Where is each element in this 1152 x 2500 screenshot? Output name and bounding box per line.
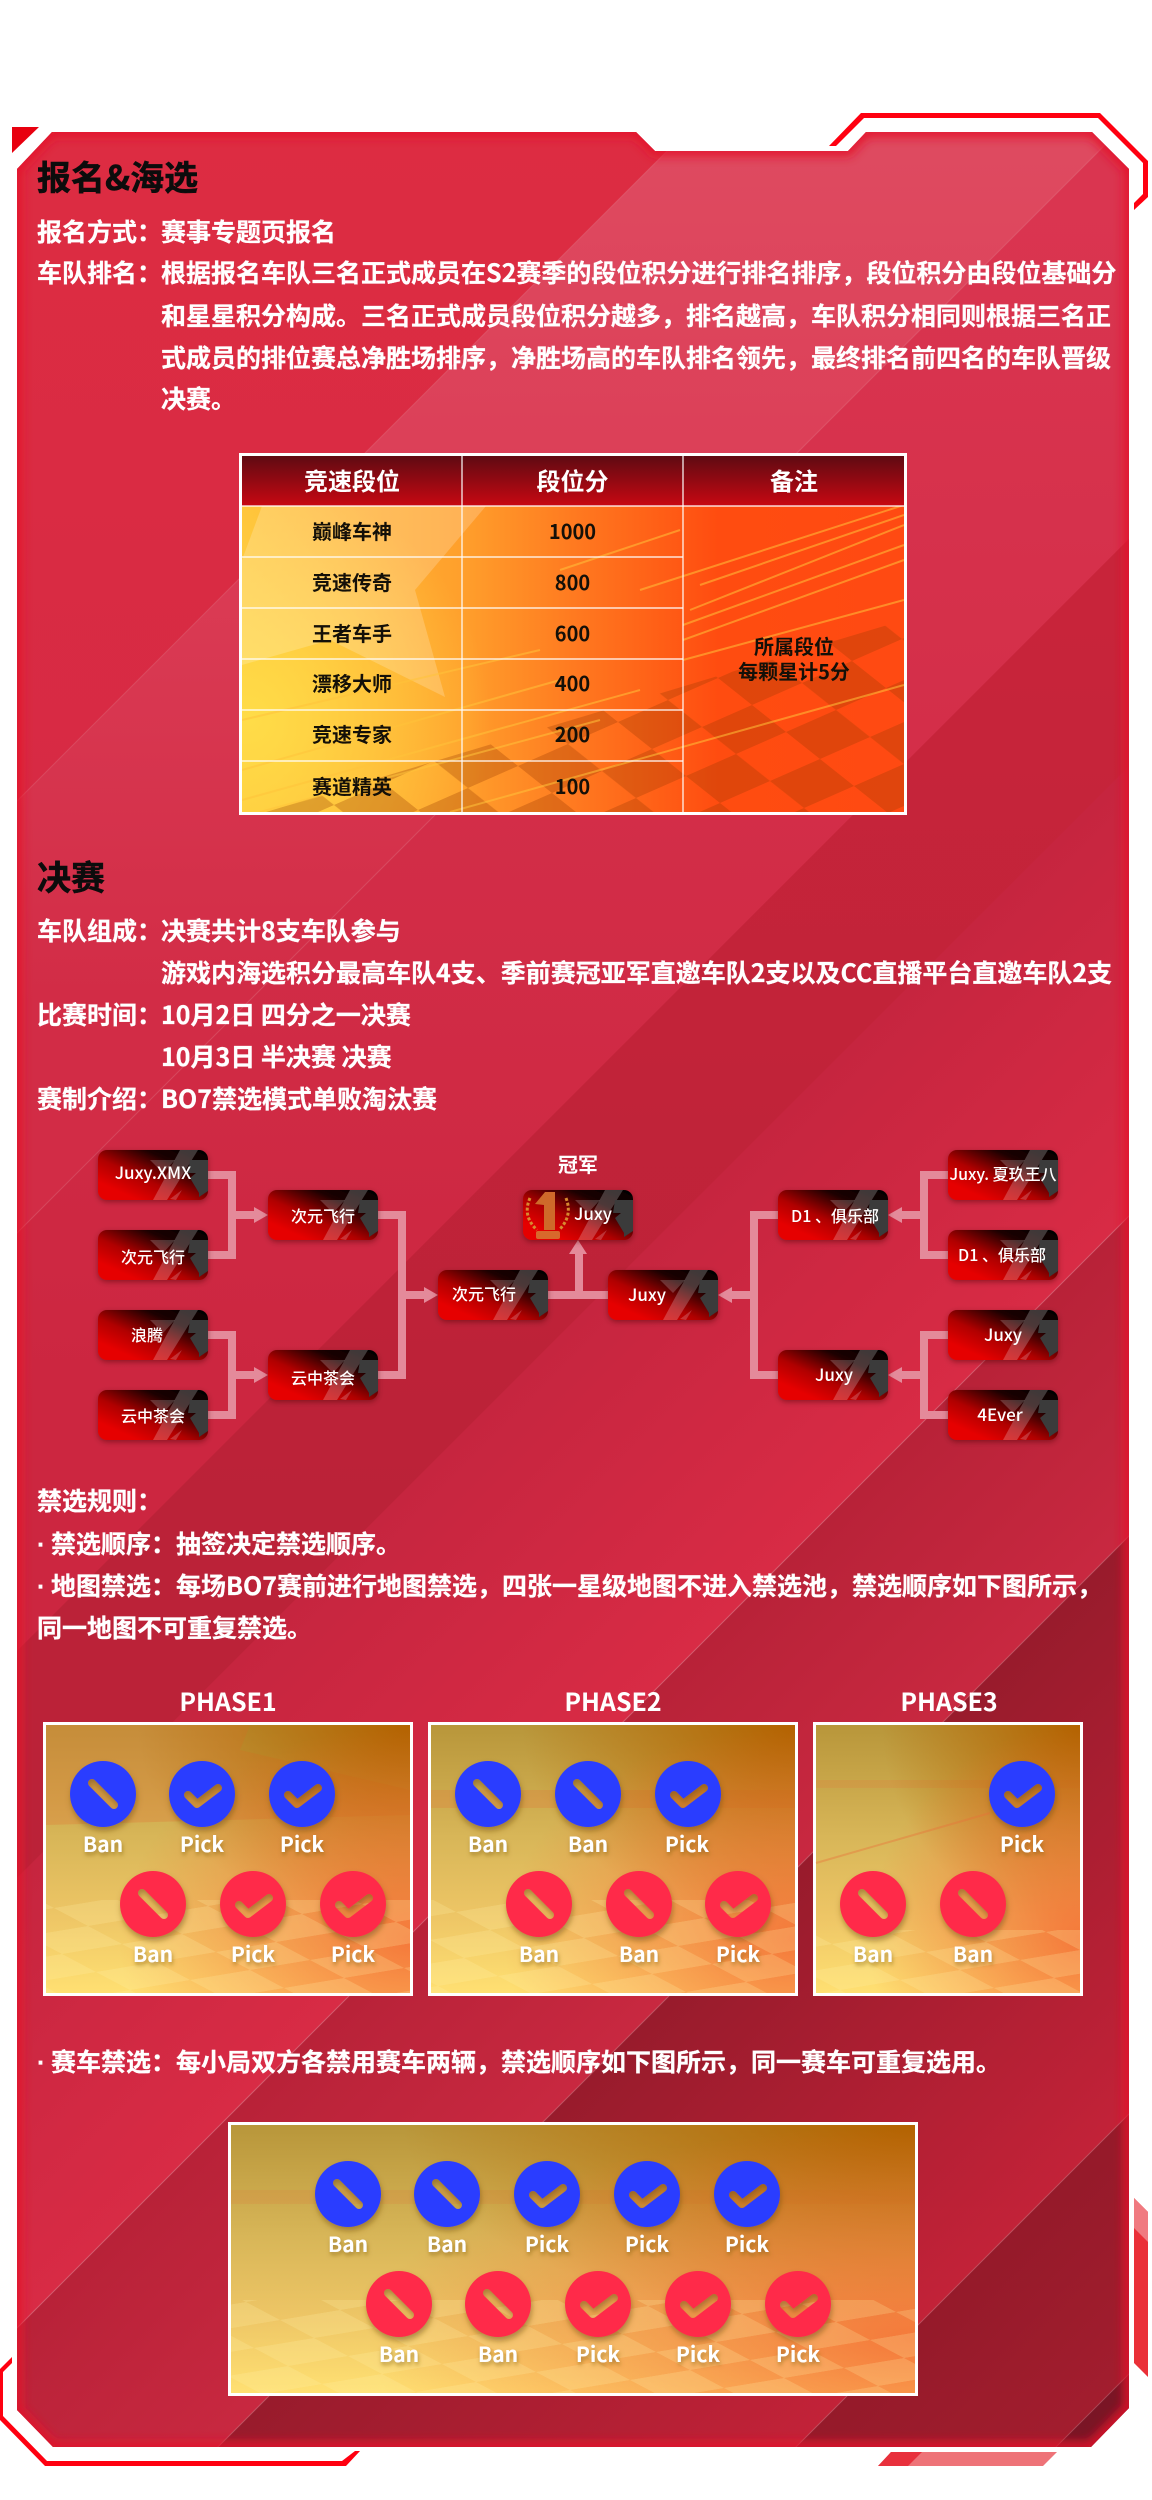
table rows: 400	[555, 668, 590, 697]
card: quarter winner 次元飞行	[268, 1190, 378, 1240]
labels: Ban	[328, 2229, 368, 2259]
tournament bracket	[98, 1149, 1058, 1440]
card: finalist Juxy: Juxy	[628, 1281, 667, 1306]
labels: Pick	[576, 2339, 620, 2369]
finals text block: 游戏内海选积分最高车队4支、季前赛冠亚军直邀车队2支以及CC直播平台直邀车队2支	[161, 954, 1112, 990]
finals text block: 10月3日 半决赛 决赛	[161, 1038, 392, 1074]
labels: Ban	[478, 2339, 518, 2369]
icon: red pick	[765, 2271, 831, 2337]
table rows: 竞速专家	[312, 719, 392, 748]
table rows: 100	[555, 771, 590, 800]
labels: Pick	[280, 1829, 324, 1859]
ban and pick rules text: 同一地图不可重复禁选。	[37, 1609, 312, 1645]
top-right red outline	[829, 113, 1148, 210]
panel: phase 1	[43, 1722, 413, 1996]
finals text block: BO7禁选模式单败淘汰赛	[161, 1080, 437, 1116]
labels	[853, 1829, 1044, 1969]
card: 次元飞行	[98, 1230, 208, 1280]
registration text block: 和星星积分构成。三名正式成员段位积分越多，排名越高，车队积分相同则根据三名正	[161, 297, 1111, 333]
icon: blue ban	[70, 1761, 136, 1827]
labels: Pick	[776, 2339, 820, 2369]
right side accent bar	[1134, 2198, 1148, 2377]
card: quarter winner Juxy	[778, 1350, 888, 1400]
icon: blue pick	[655, 1761, 721, 1827]
finals text block: 10月2日 四分之一决赛	[161, 996, 411, 1032]
card: finalist 次元飞行	[438, 1270, 548, 1320]
car ban rule text: 赛车禁选：每小局双方各禁用赛车两辆，禁选顺序如下图所示，同一赛车可重复选用。	[51, 2043, 1001, 2079]
labels: Pick	[716, 1939, 760, 1969]
table header: 备注	[770, 462, 818, 497]
card: quarter winner D1、俱乐部: D1 、俱乐部	[791, 1203, 879, 1227]
table rows: 600	[555, 618, 590, 647]
champion label: 冠军	[558, 1149, 598, 1178]
card: 浪腾: 浪腾	[131, 1322, 163, 1346]
labels: Ban	[83, 1829, 123, 1859]
icon: blue pick	[169, 1761, 235, 1827]
card: Juxy. 夏玖王八: Juxy. 夏玖王八	[949, 1161, 1057, 1185]
icon: blue pick	[614, 2161, 680, 2227]
card: D1、俱乐部: D1 、俱乐部	[958, 1242, 1046, 1266]
icon: red pick	[320, 1871, 386, 1937]
registration text block: 根据报名车队三名正式成员在S2赛季的段位积分进行排名排序，段位积分由段位基础分	[161, 254, 1116, 290]
table header: 段位分	[536, 462, 608, 497]
card: Juxy: Juxy	[984, 1321, 1023, 1346]
labels: Ban	[519, 1939, 559, 1969]
icon: blue ban	[315, 2161, 381, 2227]
heading: PHASE3: PHASE3	[900, 1683, 998, 1719]
ban and pick rules text	[37, 1482, 1102, 1645]
card: quarter winner Juxy: Juxy	[815, 1361, 854, 1386]
panel: phase 2	[428, 1722, 798, 1996]
icon: blue pick	[989, 1761, 1055, 1827]
icon: red ban	[606, 1871, 672, 1937]
table header	[242, 456, 904, 506]
finals text block: 比赛时间：	[37, 996, 162, 1032]
card: 云中茶会	[98, 1390, 208, 1440]
labels: Ban	[468, 1829, 508, 1859]
labels: Pick	[231, 1939, 275, 1969]
panel: car ban order	[228, 2122, 918, 2396]
registration text block: 式成员的排位赛总净胜场排序，净胜场高的车队排名领先，最终排名前四名的车队晋级	[161, 339, 1111, 375]
icon: red ban	[506, 1871, 572, 1937]
table rows: 漂移大师	[312, 668, 392, 697]
icon: trophy number one	[527, 1192, 568, 1239]
icon: red pick	[220, 1871, 286, 1937]
icon: red ban	[120, 1871, 186, 1937]
icon: blue ban	[555, 1761, 621, 1827]
labels: Pick	[525, 2229, 569, 2259]
labels: Ban	[379, 2339, 419, 2369]
registration text block: 决赛。	[161, 380, 236, 416]
ban and pick rules text: 禁选规则：	[37, 1482, 162, 1518]
icon: blue pick	[514, 2161, 580, 2227]
icon: red pick	[705, 1871, 771, 1937]
table rows	[312, 516, 596, 800]
car ban rule text: ·	[37, 2049, 45, 2077]
icon: red pick	[565, 2271, 631, 2337]
table header: 竞速段位	[304, 462, 400, 497]
labels: Pick	[676, 2339, 720, 2369]
card: Juxy.XMX	[98, 1150, 208, 1200]
registration text block: 车队排名：	[37, 254, 162, 290]
table grid	[242, 456, 904, 812]
card: Juxy. 夏玖王八	[948, 1150, 1058, 1200]
card: champion Juxy with trophy	[523, 1190, 633, 1240]
labels	[83, 1829, 375, 1969]
ban and pick rules text: ·	[37, 1531, 45, 1559]
top-left corner triangle	[12, 127, 39, 153]
heading: 报名&海选: 报名&海选	[37, 151, 198, 200]
labels: Pick	[1000, 1829, 1044, 1859]
icon: red ban	[940, 1871, 1006, 1937]
card: champion Juxy with trophy: Juxy	[574, 1200, 613, 1225]
labels: Ban	[853, 1939, 893, 1969]
card: Juxy.XMX: Juxy.XMX	[115, 1159, 191, 1184]
card: 次元飞行: 次元飞行	[121, 1244, 185, 1268]
table rows: 800	[555, 567, 590, 596]
labels: Pick	[625, 2229, 669, 2259]
rank points table	[239, 453, 907, 815]
icon: blue pick	[269, 1761, 335, 1827]
card: Juxy	[948, 1310, 1058, 1360]
panel: phase 3	[813, 1722, 1083, 1996]
table note: 所属段位	[754, 631, 834, 660]
bottom-right accent bar	[878, 2452, 1057, 2466]
card: finalist 次元飞行: 次元飞行	[452, 1281, 516, 1305]
labels: Pick	[180, 1829, 224, 1859]
table background artwork	[242, 505, 904, 812]
registration text block	[37, 213, 1116, 416]
table rows: 1000	[549, 516, 596, 545]
labels: Pick	[665, 1829, 709, 1859]
table rows: 巅峰车神	[312, 516, 392, 545]
table note	[738, 631, 850, 685]
table note: 每颗星计5分	[738, 656, 850, 685]
finals text block: 赛制介绍：	[37, 1080, 162, 1116]
ban and pick rules text: 禁选顺序：抽签决定禁选顺序。	[51, 1525, 401, 1561]
icon: blue pick	[714, 2161, 780, 2227]
labels: Pick	[331, 1939, 375, 1969]
heading: PHASE1: PHASE1	[179, 1683, 277, 1719]
table rows: 王者车手	[312, 618, 392, 647]
card: 4Ever: 4Ever	[977, 1401, 1023, 1426]
card: 4Ever	[948, 1390, 1058, 1440]
finals text block	[37, 912, 1112, 1116]
ban and pick rules text: 地图禁选：每场BO7赛前进行地图禁选，四张一星级地图不进入禁选池，禁选顺序如下图所示，	[51, 1567, 1102, 1603]
card: quarter winner D1、俱乐部	[778, 1190, 888, 1240]
table rows: 竞速传奇	[312, 567, 392, 596]
card: quarter winner 云中茶会: 云中茶会	[291, 1365, 355, 1389]
card: quarter winner 云中茶会	[268, 1350, 378, 1400]
labels: Ban	[619, 1939, 659, 1969]
labels	[328, 2229, 820, 2369]
labels: Ban	[427, 2229, 467, 2259]
icon: blue ban	[455, 1761, 521, 1827]
card: finalist Juxy	[608, 1270, 718, 1320]
labels	[468, 1829, 760, 1969]
icon: red ban	[840, 1871, 906, 1937]
finals text block: 决赛共计8支车队参与	[161, 912, 401, 948]
registration text block: 报名方式：	[37, 213, 162, 249]
card: D1、俱乐部	[948, 1230, 1058, 1280]
ban and pick rules text: ·	[37, 1573, 45, 1601]
icon: red ban	[366, 2271, 432, 2337]
labels: Pick	[725, 2229, 769, 2259]
icon: red ban	[465, 2271, 531, 2337]
card: 云中茶会: 云中茶会	[121, 1403, 185, 1427]
icon: blue ban	[414, 2161, 480, 2227]
heading: 决赛: 决赛	[37, 851, 105, 900]
labels: Ban	[568, 1829, 608, 1859]
card: quarter winner 次元飞行: 次元飞行	[291, 1203, 355, 1227]
card: 浪腾	[98, 1310, 208, 1360]
table rows: 赛道精英	[312, 771, 392, 800]
icon: red pick	[665, 2271, 731, 2337]
finals text block: 车队组成：	[37, 912, 162, 948]
registration text block: 赛事专题页报名	[161, 213, 336, 249]
heading: PHASE2: PHASE2	[564, 1683, 662, 1719]
labels: Ban	[953, 1939, 993, 1969]
bracket connectors	[208, 1171, 948, 1419]
bottom-left red outline	[0, 2357, 360, 2466]
table rows: 200	[555, 719, 590, 748]
labels: Ban	[133, 1939, 173, 1969]
